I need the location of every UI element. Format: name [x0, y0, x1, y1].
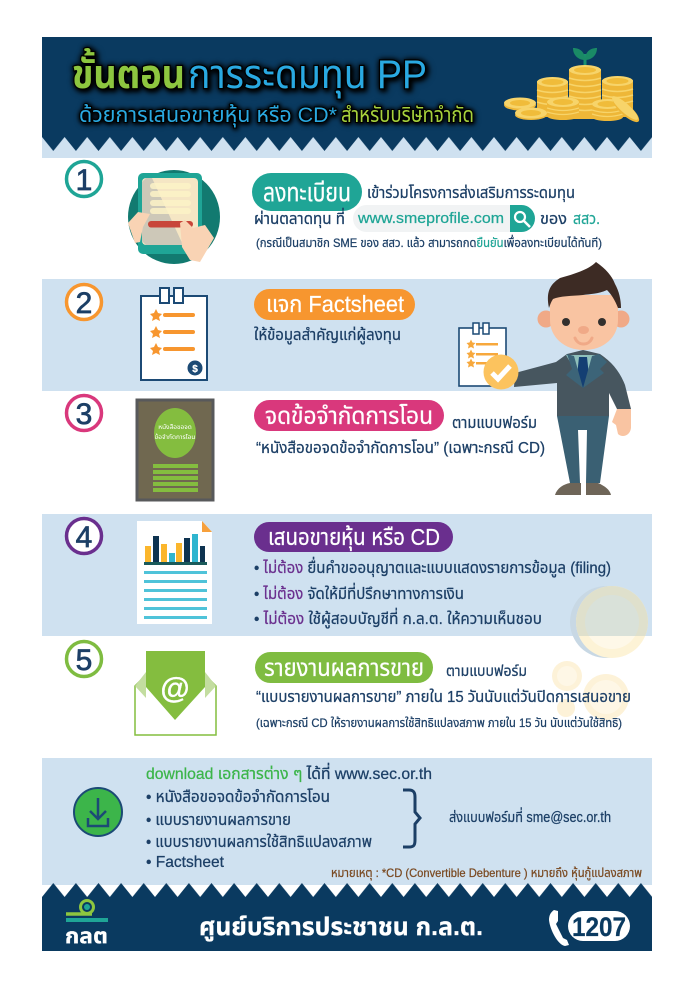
text: step 4 bullet 3: • ไม่ต้อง ใช้ผู้สอบบัญชีที่ ก.ล.ต. ให้ความเห็นชอบ [254, 607, 542, 628]
step 2 number [66, 284, 102, 320]
icon: restriction document [137, 400, 213, 500]
hotline: 1207 [572, 912, 626, 942]
text: step 4 bullet 2: • ไม่ต้อง จัดให้มีที่ปรึกษาทางการเงิน [254, 582, 464, 603]
title: การระดมทุน PP [188, 53, 427, 98]
step 2 number: 2 [76, 287, 92, 320]
background coins [552, 586, 648, 720]
logo: SEC [65, 900, 108, 948]
torso and arms [514, 350, 631, 416]
icon: restriction document: หนังสือขอจด [158, 423, 192, 431]
icon: email envelope [135, 651, 216, 735]
heading pill: register: ลงทะเบียน [263, 177, 351, 207]
step 1 number [66, 162, 102, 197]
text: step 3 line 1: ตามแบบฟอร์ม [452, 415, 537, 432]
search box: www.smeprofile.com [357, 210, 504, 227]
text: download heading: download เอกสารต่าง ๆ ได้ที่ www.sec.or.th [146, 762, 432, 783]
text: of OSMEP: ของ [540, 211, 567, 228]
icon: restriction document: ข้อจำกัดการโอน [155, 433, 195, 441]
text: step 4 bullet 1: • ไม่ต้อง ยื่นคำขออนุญาตและแบบแสดงรายการข้อมูล (filing) [254, 556, 611, 577]
subtitle: ด้วยการเสนอขายหุ้น หรือ CD* [79, 103, 337, 128]
legs [557, 416, 609, 483]
shirt, tie and lapels [566, 355, 600, 385]
text: step 1 note: (กรณีเป็นสมาชิก SME ของ สสว. แล้ว สามารถกดยืนยันเพื่อลงทะเบียนได้ทันที) [256, 234, 602, 250]
text: step 1 line 1: เข้าร่วมโครงการส่งเสริมการระดมทุน [367, 184, 575, 202]
step 3 number [66, 396, 102, 431]
title [72, 47, 427, 98]
illustration: businessman with clipboard [459, 262, 631, 495]
icon: email envelope: @ [160, 672, 190, 705]
text: step 2: ให้ข้อมูลสำคัญแก่ผู้ลงทุน [254, 326, 401, 344]
text: step 5 line 2: “แบบรายงานผลการขาย” ภายใน 15 วันนับแต่วันปิดการเสนอขาย [256, 688, 631, 706]
icon: download [74, 788, 122, 836]
step 5 number [66, 642, 102, 677]
list: downloadable forms: • หนังสือขอจดข้อจำกัดการโอน [146, 789, 330, 806]
text: of OSMEP [540, 211, 600, 228]
panel: step bands [42, 137, 652, 885]
mini clipboard [459, 323, 506, 386]
list: downloadable forms [146, 789, 372, 871]
heading pill: transfer restriction: จดข้อจำกัดการโอน [265, 403, 433, 430]
list: downloadable forms: • Factsheet [146, 854, 225, 871]
subtitle: สำหรับบริษัทจำกัด [341, 104, 474, 127]
text: step 5 line 1: ตามแบบฟอร์ม [446, 663, 527, 680]
text: step 1 line 2: ผ่านตลาดทุน ที่ [254, 207, 345, 228]
panel: footer [42, 883, 652, 951]
title: ขั้นตอน [72, 47, 185, 97]
footer title: ศูนย์บริการประชาชน ก.ล.ต. [199, 913, 483, 942]
note: หมายเหตุ : *CD (Convertible Debenture ) หมายถึง หุ้นกู้แปลงสภาพ [331, 866, 642, 880]
subtitle [79, 103, 474, 128]
icon: clipboard factsheet [141, 288, 207, 380]
text: send forms: ส่งแบบฟอร์มที่ sme@sec.or.th [449, 807, 611, 826]
icon: report with bar chart [137, 521, 212, 624]
list: downloadable forms: • แบบรายงานผลการขาย [146, 812, 291, 829]
step 3 number: 3 [76, 398, 92, 431]
heading pill: factsheet: แจก Factsheet [266, 291, 405, 317]
head [538, 310, 554, 328]
icon: tablet registration [128, 170, 220, 264]
step 4 number [66, 518, 102, 554]
list: downloadable forms: • แบบรายงานผลการใช้สิทธิแปลงสภาพ [146, 834, 372, 851]
search box [353, 205, 535, 232]
check badge [484, 354, 518, 390]
logo: SEC: กลต [65, 925, 108, 948]
text: step 3 line 2: “หนังสือขอจดข้อจำกัดการโอน” (เฉพาะกรณี CD) [256, 440, 545, 457]
heading pill: sales report: รายงานผลการขาย [264, 655, 424, 682]
brace [403, 790, 420, 847]
text: step 5 note: (เฉพาะกรณี CD ให้รายงานผลการใช้สิทธิแปลงสภาพ ภายใน 15 วัน นับแต่วันใช้สิทธิ) [256, 716, 622, 730]
heading pill: offer shares: เสนอขายหุ้น หรือ CD [268, 524, 440, 551]
text: of OSMEP: สสว. [573, 211, 600, 228]
panel: header banner [42, 37, 652, 151]
icon: coin stacks with sprout [504, 48, 642, 125]
step 1 number: 1 [76, 164, 92, 197]
heading pill: register [252, 173, 362, 211]
icon: clipboard factsheet: $ [192, 364, 198, 375]
step 4 number: 4 [76, 521, 92, 554]
hotline [549, 910, 630, 946]
step 5 number: 5 [76, 644, 92, 677]
